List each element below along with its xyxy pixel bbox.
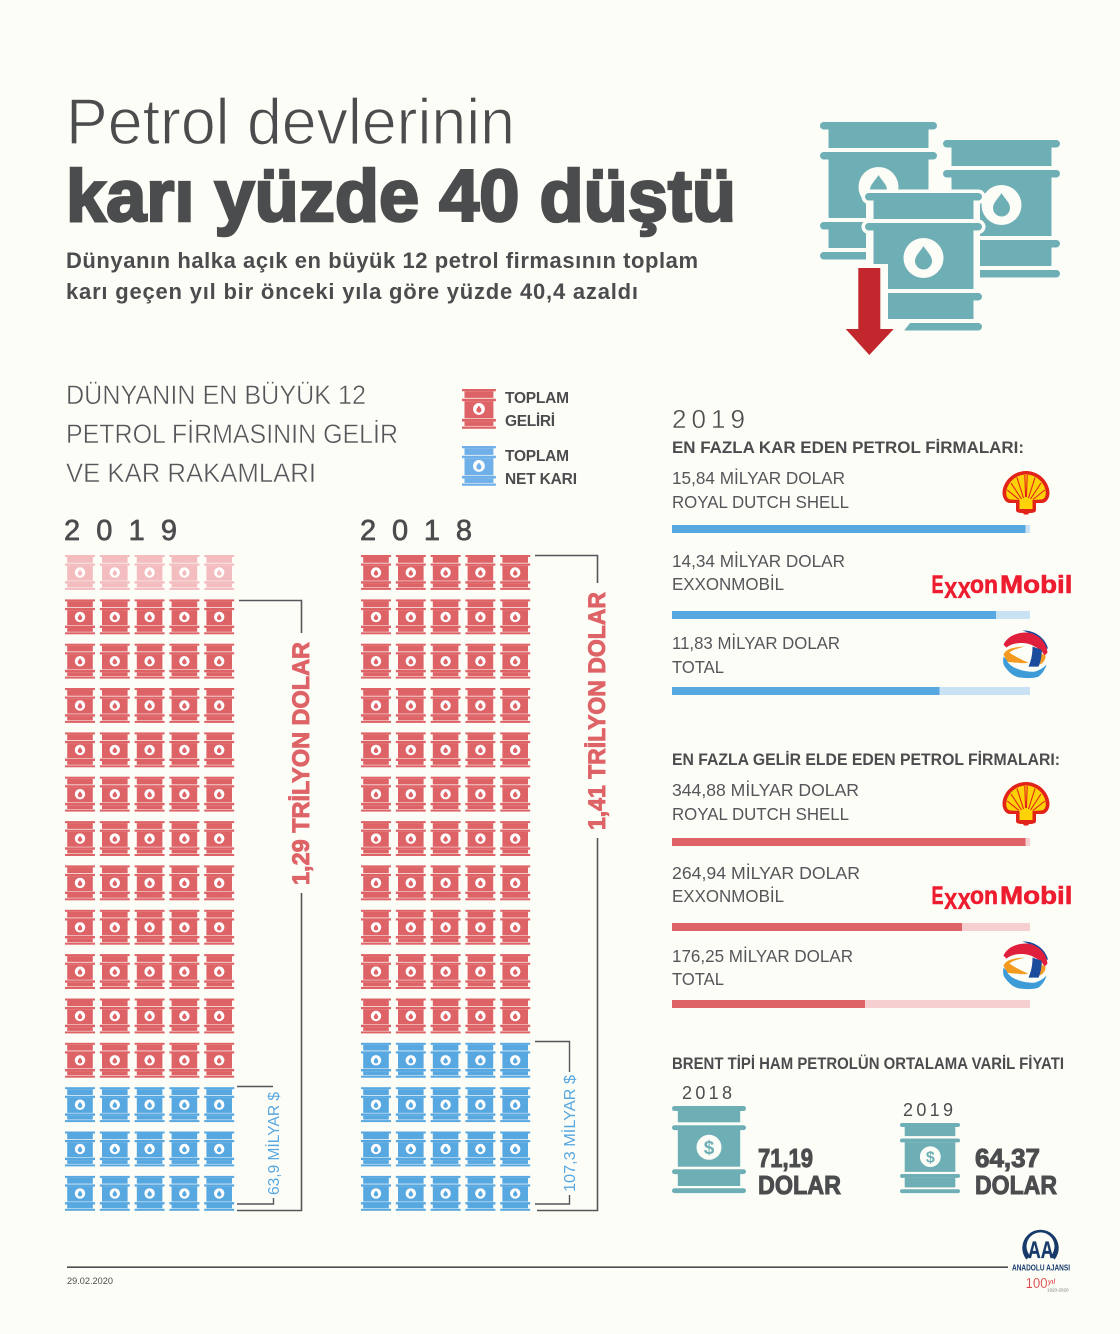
row: exxonmobil profit: 14,34 MİLYAR DOLAR [672, 551, 845, 571]
heading: brent: BRENT TİPİ HAM PETROLÜN ORTALAMA VARİL FİYATI [672, 1054, 1064, 1073]
row: exxonmobil revenue: 264,94 MİLYAR DOLAR [672, 863, 860, 883]
title: karı yüzde 40 düştü [66, 156, 736, 237]
row: total profit: TOTAL [672, 657, 724, 677]
title [66, 85, 736, 237]
section heading: PETROL FİRMASININ GELİR [66, 418, 398, 449]
bracket and total 2019: 1,29 TRİLYON DOLAR [288, 642, 315, 885]
row: exxonmobil revenue: EXXONMOBİL [672, 886, 784, 906]
bracket and total 2018 [535, 556, 611, 1210]
row: total revenue [672, 946, 1030, 1008]
icon: shell logo [1002, 471, 1050, 514]
bracket and total 2018: 1,41 TRİLYON DOLAR [584, 592, 611, 830]
year heading 2018: 2018 [360, 515, 472, 547]
legend: GELİRİ [505, 413, 555, 430]
row: total profit: 11,83 MİLYAR DOLAR [672, 633, 840, 653]
bracket and net profit 2018 [535, 1042, 579, 1204]
section heading [66, 380, 398, 488]
row: total profit [672, 633, 1030, 695]
panel: top profit companies [672, 404, 1072, 695]
icon: barrel 2018 [672, 1106, 746, 1193]
legend [462, 389, 577, 488]
bracket and net profit 2019 [237, 1086, 283, 1204]
logo: anadolu ajansı [1012, 1230, 1070, 1292]
icon: total logo [1003, 631, 1048, 678]
legend: TOPLAM [505, 390, 569, 407]
heading: highest revenue: EN FAZLA GELİR ELDE EDEN PETROL FİRMALARI: [672, 751, 1060, 769]
year 2018: 2018 [682, 1083, 732, 1103]
subtitle [66, 248, 698, 304]
icon: barrel 2019: $ [926, 1150, 935, 1166]
row: shell profit [672, 468, 1030, 533]
icon: barrel 2019 [900, 1123, 960, 1193]
footer line [67, 1266, 1008, 1268]
panel: brent oil price [672, 1054, 1064, 1200]
icon: exxonmobil logo [932, 570, 1072, 605]
row: total revenue: 176,25 MİLYAR DOLAR [672, 946, 853, 966]
logo: anadolu ajansı: AA [1028, 1237, 1054, 1264]
bracket and net profit 2018: 107,3 MİLYAR $ [561, 1075, 579, 1192]
subtitle: Dünyanın halka açık en büyük 12 petrol firmasının toplam [66, 248, 698, 273]
title: Petrol devlerinin [66, 85, 515, 158]
row: shell revenue [672, 780, 1030, 846]
value 2018: DOLAR [758, 1170, 841, 1200]
row: exxonmobil profit: EXXONMOBİL [672, 574, 784, 594]
logo: anadolu ajansı: yıl [1047, 1279, 1055, 1286]
row: shell profit: 15,84 MİLYAR DOLAR [672, 468, 845, 488]
row: shell profit: ROYAL DUTCH SHELL [672, 492, 849, 512]
bracket and total 2019 [237, 600, 315, 1210]
row: exxonmobil profit [672, 551, 1030, 619]
value 2019: DOLAR [975, 1170, 1057, 1200]
value 2019: 64,37 [975, 1143, 1040, 1173]
section heading: DÜNYANIN EN BÜYÜK 12 [66, 380, 366, 410]
icon: barrel 2018: $ [704, 1138, 715, 1159]
icon: shell logo [1002, 782, 1050, 826]
barrel grid 2019 [65, 555, 234, 1211]
legend: TOPLAM [505, 448, 569, 465]
logo: anadolu ajansı: 1920-2020 [1047, 1288, 1069, 1292]
subtitle: karı geçen yıl bir önceki yıla göre yüzde 40,4 azaldı [66, 279, 638, 304]
heading: profit 2019: 2019 [672, 404, 745, 434]
row: exxonmobil revenue [672, 863, 1030, 931]
legend: NET KARI [505, 471, 577, 488]
logo: anadolu ajansı: 100 [1026, 1275, 1048, 1292]
icon: oil barrels with falling arrow [820, 122, 1060, 360]
date: 29.02.2020 [67, 1276, 113, 1286]
logo: anadolu ajansı: ANADOLU AJANSI [1012, 1262, 1070, 1272]
row: shell revenue: 344,88 MİLYAR DOLAR [672, 780, 859, 800]
row: shell revenue: ROYAL DUTCH SHELL [672, 804, 849, 824]
row: total revenue: TOTAL [672, 969, 724, 989]
bracket and net profit 2019: 63,9 MİLYAR $ [265, 1092, 283, 1195]
heading: most profitable: EN FAZLA KAR EDEN PETROL FİRMALARI: [672, 439, 1024, 457]
year heading 2019: 2019 [64, 515, 177, 547]
icon: exxonmobil logo [932, 881, 1072, 916]
panel: top revenue companies [672, 751, 1072, 1008]
barrel grid 2018 [361, 555, 530, 1211]
section heading: VE KAR RAKAMLARI [66, 458, 316, 488]
value 2018: 71,19 [758, 1143, 813, 1173]
value 2018 [758, 1143, 841, 1200]
icon: total logo [1003, 942, 1048, 989]
value 2019 [975, 1143, 1057, 1200]
year 2019: 2019 [903, 1100, 953, 1120]
